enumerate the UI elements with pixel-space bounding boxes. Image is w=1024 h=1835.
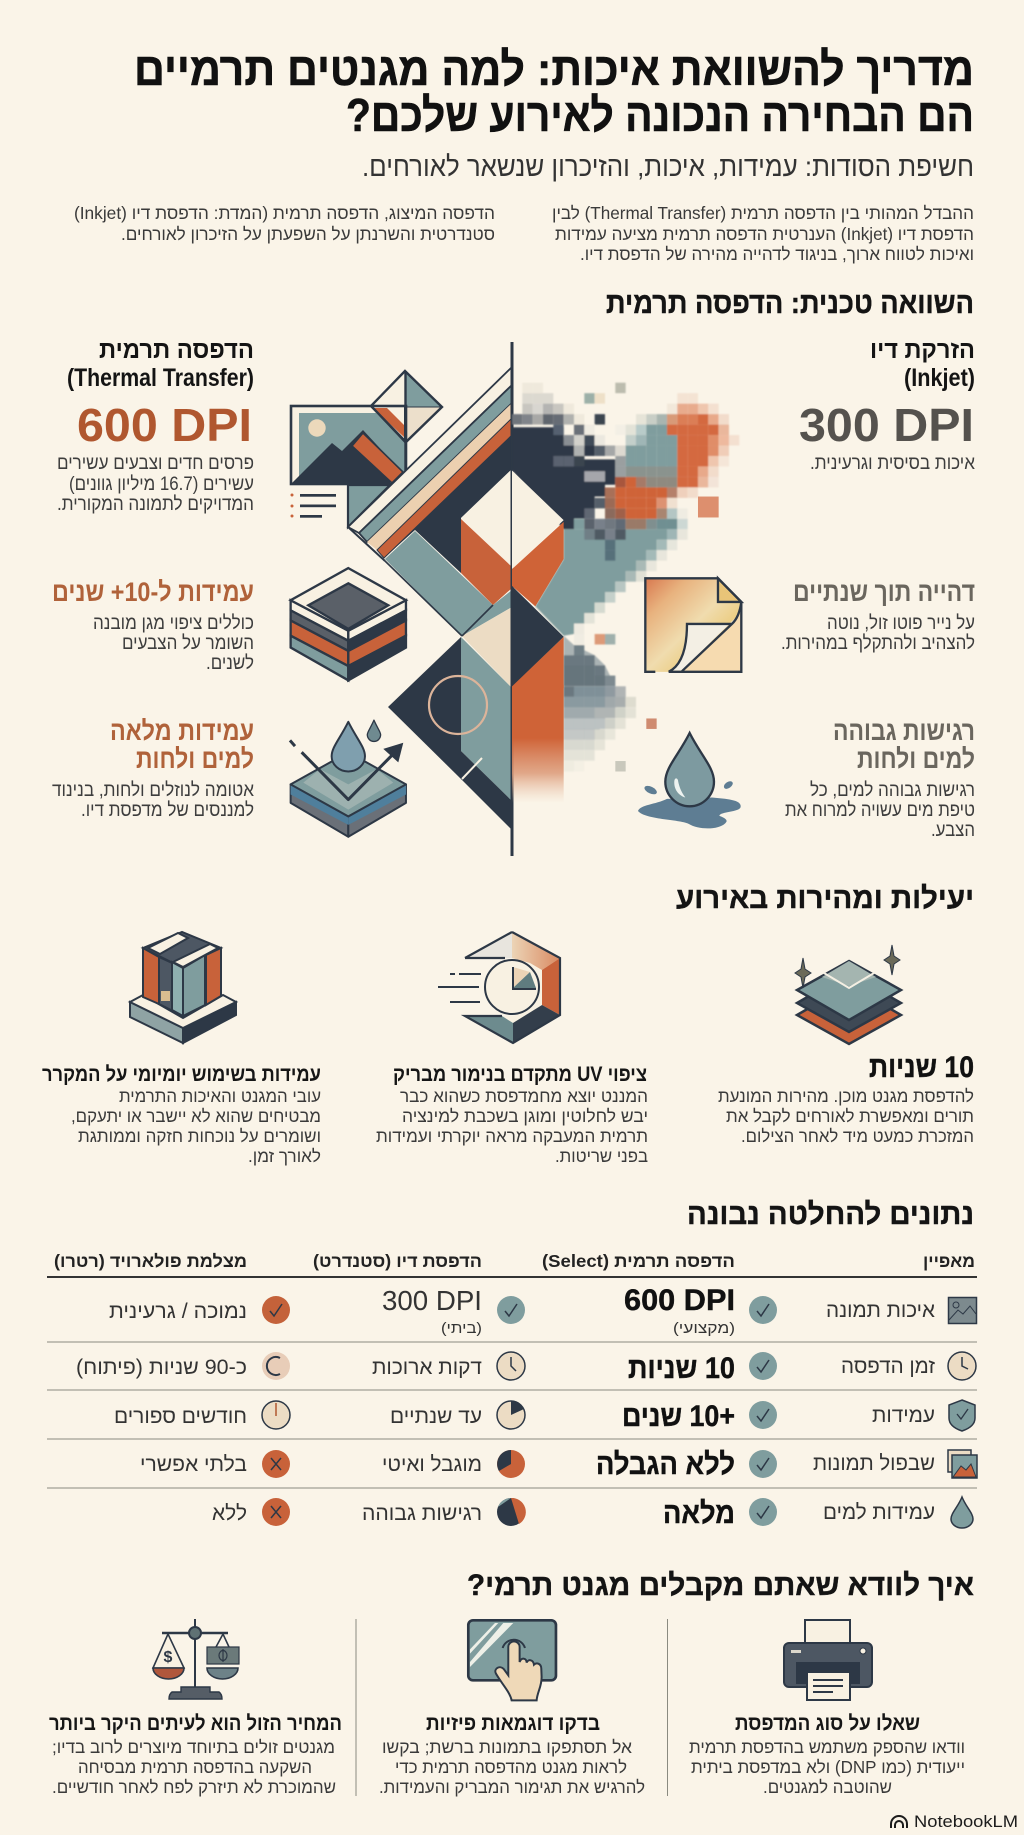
diagonal stripes — [348, 367, 512, 688]
price text: השקעה בהדפסה תרמית מבסיחה — [78, 1757, 312, 1777]
icon label: dollar sign: $ — [164, 1649, 173, 1666]
table row: image quality: נמוכה / גרעינית — [109, 1300, 247, 1323]
title: מדריך להשוואת איכות: למה מגנטים תרמיים — [134, 43, 974, 95]
UV text — [376, 1086, 648, 1166]
speed text — [718, 1086, 974, 1146]
crisp shapes — [512, 471, 564, 803]
samples text: לראות מגנט מהדפסה תרמית כדי — [395, 1757, 627, 1777]
samples heading: בדקו דוגמאות פיזיות — [426, 1712, 600, 1735]
thermal water text — [52, 780, 254, 821]
price text — [52, 1737, 336, 1797]
table row: print time: דקות ארוכות — [372, 1356, 482, 1379]
speed text: להדפסת מגנט מוכן. מהירות המונעת — [718, 1086, 974, 1106]
table row: durability — [114, 1400, 975, 1433]
durability text: ושומרים על נוכחות חזקה וממותגת — [78, 1126, 321, 1146]
durability text — [71, 1086, 321, 1166]
printer text: שהוטבה למגנטים. — [763, 1777, 892, 1797]
table row: image quality — [109, 1284, 976, 1337]
inkjet fading text — [781, 613, 975, 654]
inkjet heading: הזרקת דיו — [870, 336, 975, 364]
thermal heading: הדפסה תרמית — [99, 336, 254, 364]
inkjet quality text: איכות בסיסית וגרעינית. — [810, 453, 975, 474]
table row: durability: עד שנתיים — [390, 1405, 482, 1428]
table row: print time: כ-90 שניות (פיתוח) — [76, 1356, 247, 1379]
icon: shield — [949, 1400, 975, 1431]
UV heading: ציפוי UV מתקדם בנימור מבריק — [393, 1063, 647, 1086]
price heading: המחיר הזול הוא לעיתים היקר ביותר — [49, 1712, 342, 1735]
table header: מצלמת פולארויד (רטרו) — [54, 1251, 247, 1271]
comparison table — [47, 1251, 977, 1530]
icon: stacked photos — [948, 1450, 977, 1478]
central illustration: pixelated half — [512, 383, 741, 828]
icon: clock hexagon — [438, 932, 560, 1043]
inkjet water heading — [833, 716, 975, 774]
heading: efficiency: יעילות ומהירות באירוע — [676, 882, 974, 915]
table row: duplicates: מוגבל ואיטי — [382, 1453, 482, 1476]
panel: cheap price warning — [49, 1619, 342, 1797]
thermal durability text: השומר על הצבעים — [122, 633, 254, 654]
samples text: אל תסתפקו בתמונות ברשת; בקשו — [382, 1737, 632, 1757]
heading: how to verify: איך לוודא שאתם מקבלים מגנט תרמי? — [467, 1569, 974, 1602]
thermal durability text: לשנים. — [206, 653, 254, 674]
panel: daily durability feature — [42, 932, 321, 1166]
table row: durability: עמידות — [872, 1404, 935, 1427]
durability text: לאורך זמן. — [248, 1146, 321, 1166]
thermal 600 DPI figure: 600 DPI — [77, 399, 252, 451]
panel: inkjet column — [781, 336, 975, 841]
UV text: יבש לחלוטין ומוגן בשכבת למינציה — [402, 1106, 648, 1126]
icon: picture — [948, 1298, 976, 1324]
table row: durability: +10 שנים — [622, 1400, 735, 1433]
lower diamond — [388, 637, 512, 830]
icon: hand touching magnet — [468, 1620, 556, 1700]
inkjet water text — [785, 780, 975, 841]
table row: duplicates: בלתי אפשרי — [140, 1453, 247, 1476]
thermal quality text: פרסים חדים וצבעים עשירים — [57, 453, 254, 474]
intro text: left column — [74, 203, 495, 244]
inkjet fading text: להצהיב ולהתקלף במהירות. — [781, 633, 975, 654]
panel: ask about printer — [689, 1620, 965, 1797]
icon: faded peeling photo — [645, 578, 741, 672]
table row: duplicates: ללא הגבלה — [596, 1448, 735, 1481]
inkjet water heading: רגישות גבוהה — [833, 716, 975, 746]
central divider line — [510, 342, 514, 856]
table row: duplicates — [140, 1448, 977, 1481]
panel: UV coating feature — [376, 932, 648, 1166]
inkjet heading — [870, 336, 975, 392]
table header — [47, 1251, 977, 1278]
printer text — [689, 1737, 965, 1797]
table row: image quality: איכות תמונה — [826, 1299, 935, 1322]
thermal water heading: למים ולחות — [136, 744, 254, 774]
price text: מגנטים זולים בתיוחד מיוצרים לרוב בדיו; — [52, 1737, 335, 1757]
inkjet water text: רגישות גבוהה למים, כל — [810, 780, 975, 801]
thermal durability heading: עמידות ל-10+ שנים — [52, 577, 254, 607]
table row: image quality: 600 DPI — [624, 1284, 735, 1317]
UV text: המננט יוצא מחמדפסת כשהוא כבר — [400, 1086, 648, 1106]
printer text: וודאו שהספק משתמש בהדפסת תרמית — [689, 1737, 965, 1757]
icon: stacked magnets — [795, 945, 901, 1044]
subtitle: חשיפת הסודות: עמידות, איכות, והזיכרון שנשאר לאורחים. — [362, 151, 974, 182]
thermal water heading: עמידות מלאה — [110, 716, 254, 746]
icon: layered protection cube — [291, 568, 406, 680]
table row: water resistance: רגישות גבוהה — [362, 1502, 482, 1525]
thermal quality text — [57, 453, 254, 515]
table row: print time: 10 שניות — [628, 1352, 735, 1385]
inkjet water text: טיפת מים עשויה למרוח את — [785, 800, 975, 821]
intro text: right column: ואיכות לטווח ארוך, בניגוד לדהייה מהירה של הדפסת דיו. — [580, 244, 974, 264]
panel: check physical samples — [379, 1620, 645, 1797]
printer heading: שאלו על סוג המדפסת — [735, 1712, 920, 1735]
table row: print time — [76, 1352, 976, 1385]
inkjet 300 DPI figure: 300 DPI — [799, 399, 974, 451]
thermal durability text — [93, 613, 254, 674]
inkjet heading: (Inkjet) — [904, 364, 975, 392]
icon: image frame with diamond — [291, 371, 442, 527]
thermal heading: (Thermal Transfer) — [67, 364, 254, 392]
stray pixels — [615, 497, 719, 772]
heading: technical comparison: השוואה טכנית: הדפסה תרמית — [606, 287, 974, 320]
icon: clock — [948, 1352, 976, 1380]
table row: durability: חודשים ספורים — [114, 1405, 247, 1428]
intro text: right column — [552, 203, 974, 264]
table row: image quality: (מקצועי) — [673, 1320, 735, 1337]
table row: image quality: (ביתי) — [441, 1320, 482, 1337]
icon: text lines — [290, 494, 336, 518]
thermal durability text: כוללים ציפוי מגן מובנה — [93, 613, 254, 634]
icon: water drop with puddle — [638, 733, 741, 828]
icon: water resistant layer — [290, 720, 406, 837]
panel: thermal transfer column — [52, 336, 254, 821]
intro text: left column: סטנדרטית והשרנתן על השפעתן על הזיכרון לאורחים. — [121, 224, 495, 244]
durability text: מבטיחים שהוא לא יישבר או יתעקם, — [71, 1106, 321, 1126]
speed heading: 10 שניות — [869, 1051, 974, 1084]
thermal heading — [67, 336, 254, 392]
icon: drop — [951, 1497, 973, 1528]
table row: water resistance: עמידות למים — [823, 1501, 935, 1524]
thermal quality text: עשירים (16.7 מיליון גוונים) — [69, 474, 254, 495]
intro text: right column: ההבדל המהותי בין הדפסה תרמית (Thermal Transfer) לבין — [552, 203, 974, 223]
table row: water resistance: ללא — [212, 1502, 247, 1525]
inkjet water text: הצבע. — [931, 820, 975, 841]
intro text: right column: הדפסת דיו (Inkjet) הענרטית הדפסה תרמית מציעה עמידות — [555, 224, 974, 244]
table row: image quality: 300 DPI — [382, 1285, 482, 1316]
thermal quality text: המדויקים לתמונה המקורית. — [57, 494, 254, 515]
table row: water resistance: מלאה — [663, 1497, 735, 1530]
samples text — [379, 1737, 645, 1797]
central illustration: sharp geometric half — [290, 367, 512, 830]
icon: printer — [784, 1620, 872, 1700]
speed text: המזכרת כמעט מיד לאחר הצילום. — [741, 1126, 974, 1146]
table header: הדפסה תרמית (Select) — [542, 1251, 735, 1271]
durability text: עובי המגנט והאיכות התרמית — [119, 1086, 321, 1106]
thermal water text: אטומה לנוזלים ולחות, בנינוד — [52, 780, 254, 801]
table row: water resistance — [212, 1497, 973, 1530]
printer text: ייעודית (כמו DNP) ולא במדפסת ביתית — [691, 1757, 965, 1777]
inkjet water heading: למים ולחות — [857, 744, 975, 774]
table row: duplicates: שבפול תמונות — [813, 1452, 935, 1475]
inkjet fading heading: דהייה תוך שנתיים — [793, 577, 975, 607]
inkjet fading text: על נייר פוטו זול, נוטה — [827, 613, 975, 634]
samples text: להרגיש את תגימור המבריק והעמידות. — [379, 1777, 645, 1797]
panel: speed feature — [718, 945, 974, 1146]
intro text: left column: הדפסה המיצוג, הדפסה תרמית (המדת: הדפסת דיו (Inkjet) — [74, 203, 495, 223]
table header: הדפסת דיו (סטנדרט) — [313, 1251, 482, 1271]
thermal water heading — [110, 716, 254, 774]
table row: print time: זמן הדפסה — [841, 1355, 935, 1378]
icon: balance scale — [153, 1619, 239, 1699]
UV text: תרמית המעבקה מראה יוקרתי ועמידות — [376, 1126, 648, 1146]
thermal water text: למננסים של מדפסת דיו. — [81, 800, 254, 821]
icon: durable block — [130, 932, 236, 1043]
pixel scatter — [512, 383, 739, 772]
price text: שהמוכרת לא תיזרק לפח לאחר חודשיים. — [52, 1777, 336, 1797]
UV text: בפני שריטות. — [555, 1146, 648, 1166]
speed text: תורים ומאפשרת לאורחים לקבל את — [726, 1106, 974, 1126]
title — [134, 43, 974, 141]
table header: מאפיין — [923, 1251, 975, 1271]
heading: data for decision: נתונים להחלטה נבונה — [687, 1198, 974, 1231]
logo: NotebookLM: NotebookLM — [914, 1812, 1018, 1831]
durability heading: עמידות בשימוש יומיומי על המקרר — [42, 1063, 321, 1086]
